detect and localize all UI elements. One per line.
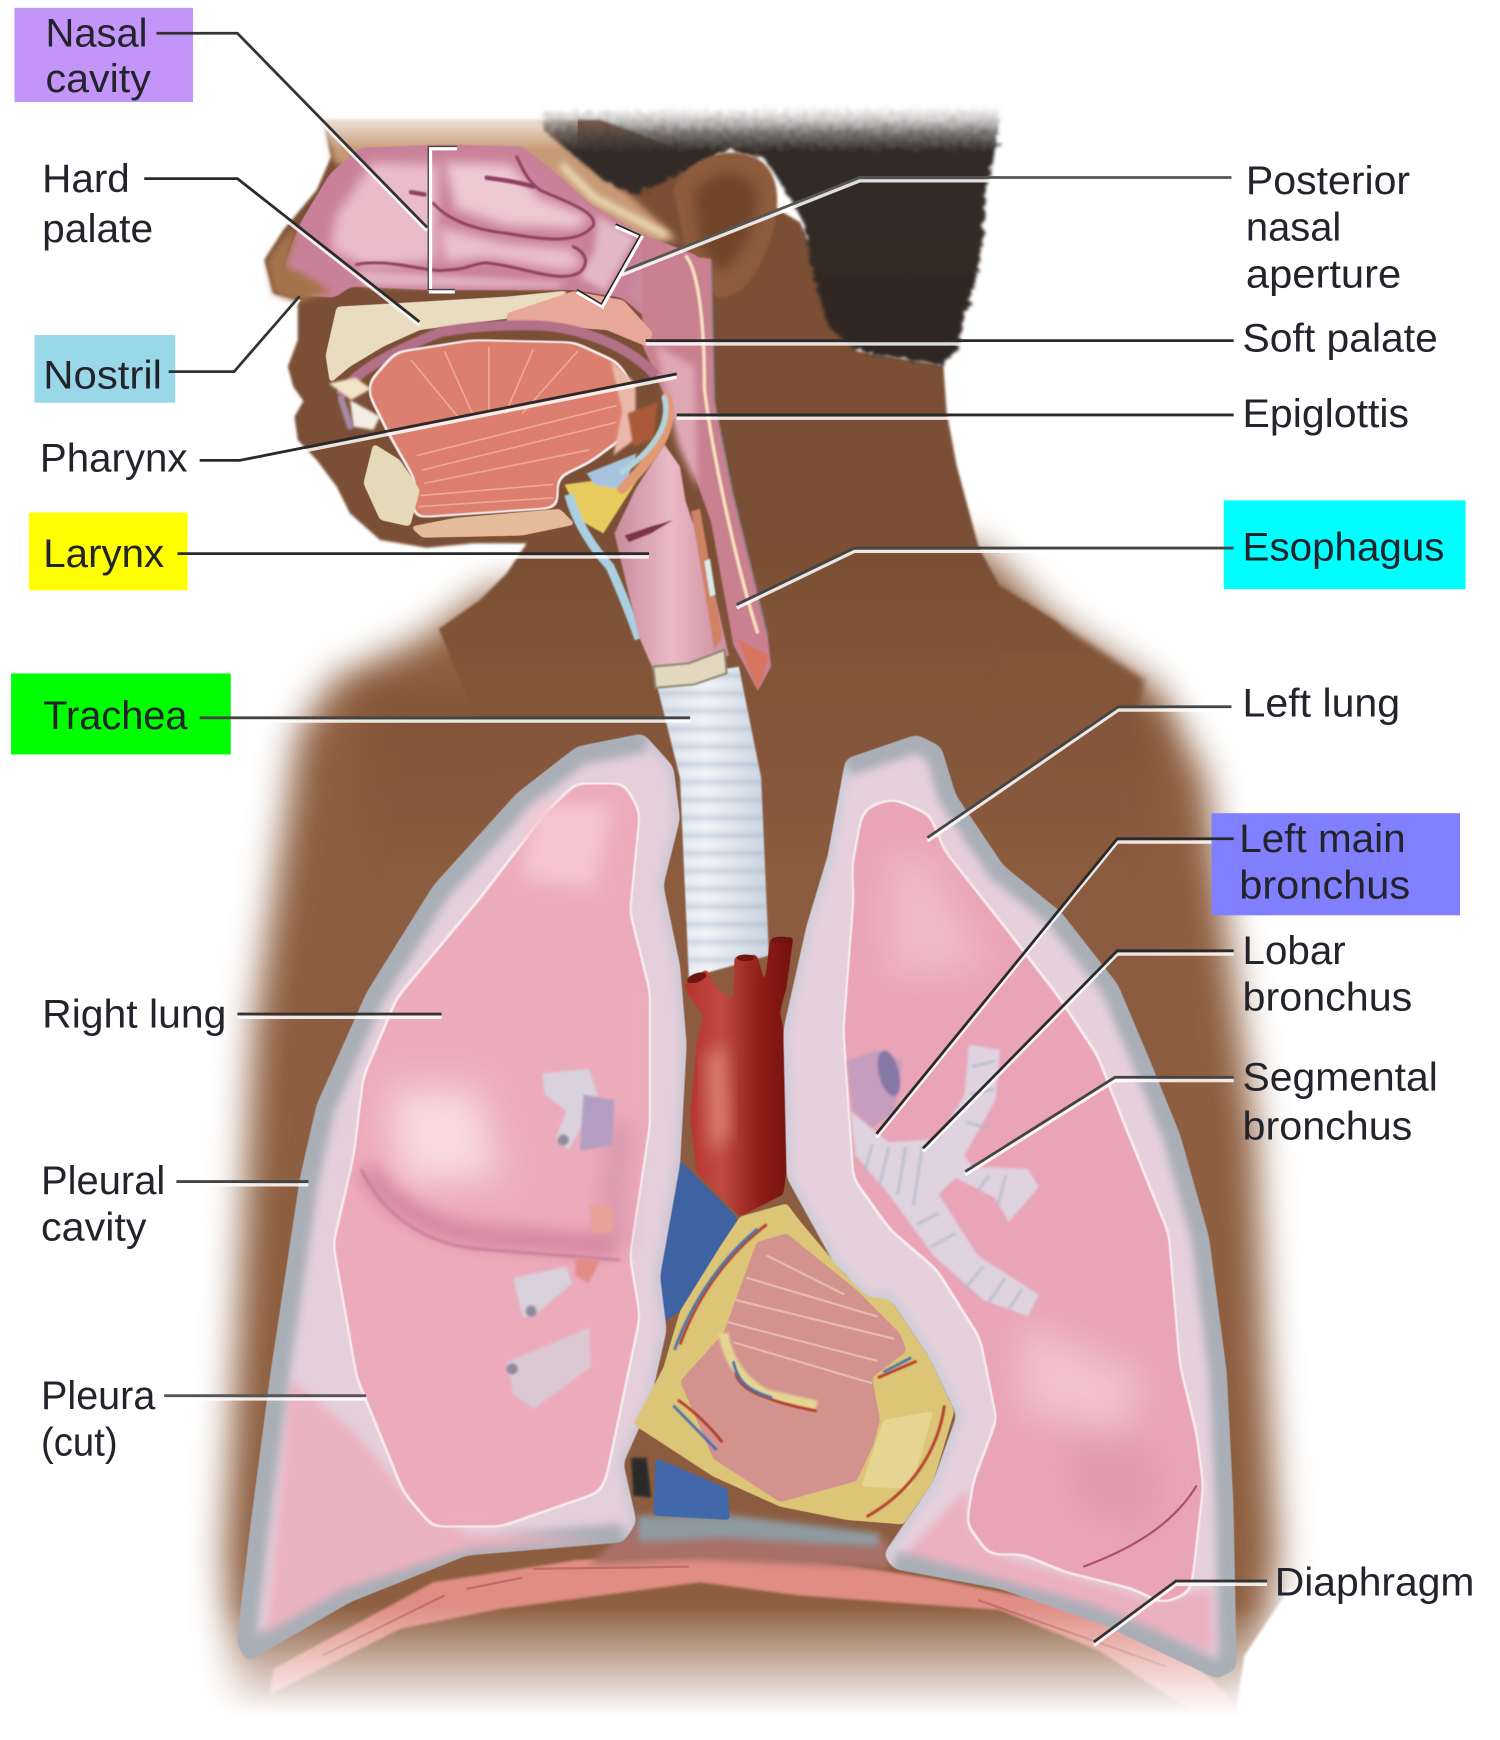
mouth roof — [340, 325, 656, 396]
label: Nasal cavity: cavity — [45, 57, 151, 101]
label: Pleural cavity: Pleural — [41, 1159, 165, 1203]
label: Pleural cavity — [41, 1159, 308, 1249]
white edge lower right — [1231, 1589, 1500, 1740]
diaphragm — [270, 1516, 1233, 1740]
label: Esophagus: Esophagus — [1243, 525, 1444, 569]
soft palate — [507, 291, 653, 347]
right bronchi — [507, 1069, 614, 1409]
cut pericardium and heart wall — [633, 1203, 954, 1524]
label: Esophagus — [737, 500, 1466, 605]
lung mottling — [889, 856, 1156, 1533]
hair — [543, 107, 1000, 366]
label: Larynx — [29, 513, 649, 590]
left lung pleura — [783, 734, 1237, 1679]
label: Diaphragm: Diaphragm — [1275, 1560, 1474, 1604]
label: Posterior nasal aperture: aperture — [1246, 252, 1401, 296]
lung fissure — [1083, 1486, 1197, 1567]
label: Soft palate: Soft palate — [1243, 317, 1438, 361]
label: Lobar bronchus — [923, 929, 1412, 1148]
label: Hard palate — [42, 157, 419, 322]
left lung — [844, 800, 1202, 1602]
label: Nostril — [34, 296, 300, 403]
label: Posterior nasal aperture: nasal — [1246, 206, 1341, 250]
nasal cavity — [267, 144, 711, 344]
top of the head fade — [300, 107, 578, 150]
label: Pleura (cut): Pleura — [41, 1374, 156, 1418]
label: Lobar bronchus: bronchus — [1243, 976, 1412, 1020]
label: Nasal cavity — [14, 8, 457, 292]
leader line highlights — [164, 37, 1267, 1645]
label: Pleura (cut) — [41, 1374, 366, 1465]
label: Larynx: Larynx — [43, 532, 164, 576]
tongue — [370, 341, 658, 517]
label: Lobar bronchus: Lobar — [1243, 929, 1346, 973]
left bronchial tree — [850, 1044, 1039, 1317]
label: Pharynx — [40, 374, 677, 481]
fissure — [367, 1169, 613, 1247]
heart — [683, 937, 793, 1217]
pulmonary vessel — [847, 1048, 904, 1128]
label: Segmental bronchus: Segmental — [1243, 1056, 1438, 1100]
label: Segmental bronchus: bronchus — [1243, 1104, 1412, 1148]
label: Pleura (cut): (cut) — [41, 1421, 118, 1465]
ear — [673, 152, 777, 298]
label: Segmental bronchus — [965, 1056, 1438, 1172]
label: Left main bronchus — [876, 813, 1460, 1134]
torso skin — [224, 544, 1278, 1733]
label: Hard palate: Hard — [42, 157, 130, 201]
right lung — [334, 784, 649, 1526]
label: Posterior nasal aperture: Posterior — [1246, 159, 1410, 203]
head and neck skin — [264, 120, 1100, 778]
label: Trachea — [11, 673, 690, 754]
label: Pharynx: Pharynx — [40, 437, 188, 481]
label: Pleural cavity: cavity — [41, 1205, 146, 1249]
upper lobe shading — [389, 1089, 500, 1183]
chest tone — [267, 689, 1200, 1556]
label: Right lung: Right lung — [42, 992, 226, 1036]
label: Nostril: Nostril — [43, 353, 162, 397]
right lung pleura — [237, 733, 687, 1662]
forehead tan above the nasal cavity — [324, 120, 678, 250]
label: Left lung: Left lung — [1243, 682, 1400, 726]
label: Nasal cavity: Nasal — [45, 12, 148, 56]
label: Epiglottis: Epiglottis — [1243, 392, 1409, 436]
label: Left lung — [927, 682, 1400, 838]
crisp shoulder edge on the right — [978, 587, 1144, 778]
label: Left main bronchus: Left main — [1239, 817, 1406, 861]
hard palate — [326, 290, 573, 383]
larynx — [614, 444, 729, 680]
label: Hard palate: palate — [42, 207, 153, 251]
pharynx wall — [642, 233, 771, 691]
jaw bone and lower lip — [329, 378, 576, 538]
label: Left main bronchus: bronchus — [1239, 864, 1410, 908]
label: Diaphragm — [1094, 1560, 1474, 1642]
label: Posterior nasal aperture — [577, 159, 1410, 306]
bottom fade — [133, 1606, 1367, 1740]
label: Trachea: Trachea — [43, 694, 188, 738]
epiglottis and hyoid region — [564, 398, 669, 639]
pale membrane along the skull base — [561, 164, 667, 236]
trachea — [653, 650, 769, 978]
blue vessels — [631, 1089, 796, 1520]
